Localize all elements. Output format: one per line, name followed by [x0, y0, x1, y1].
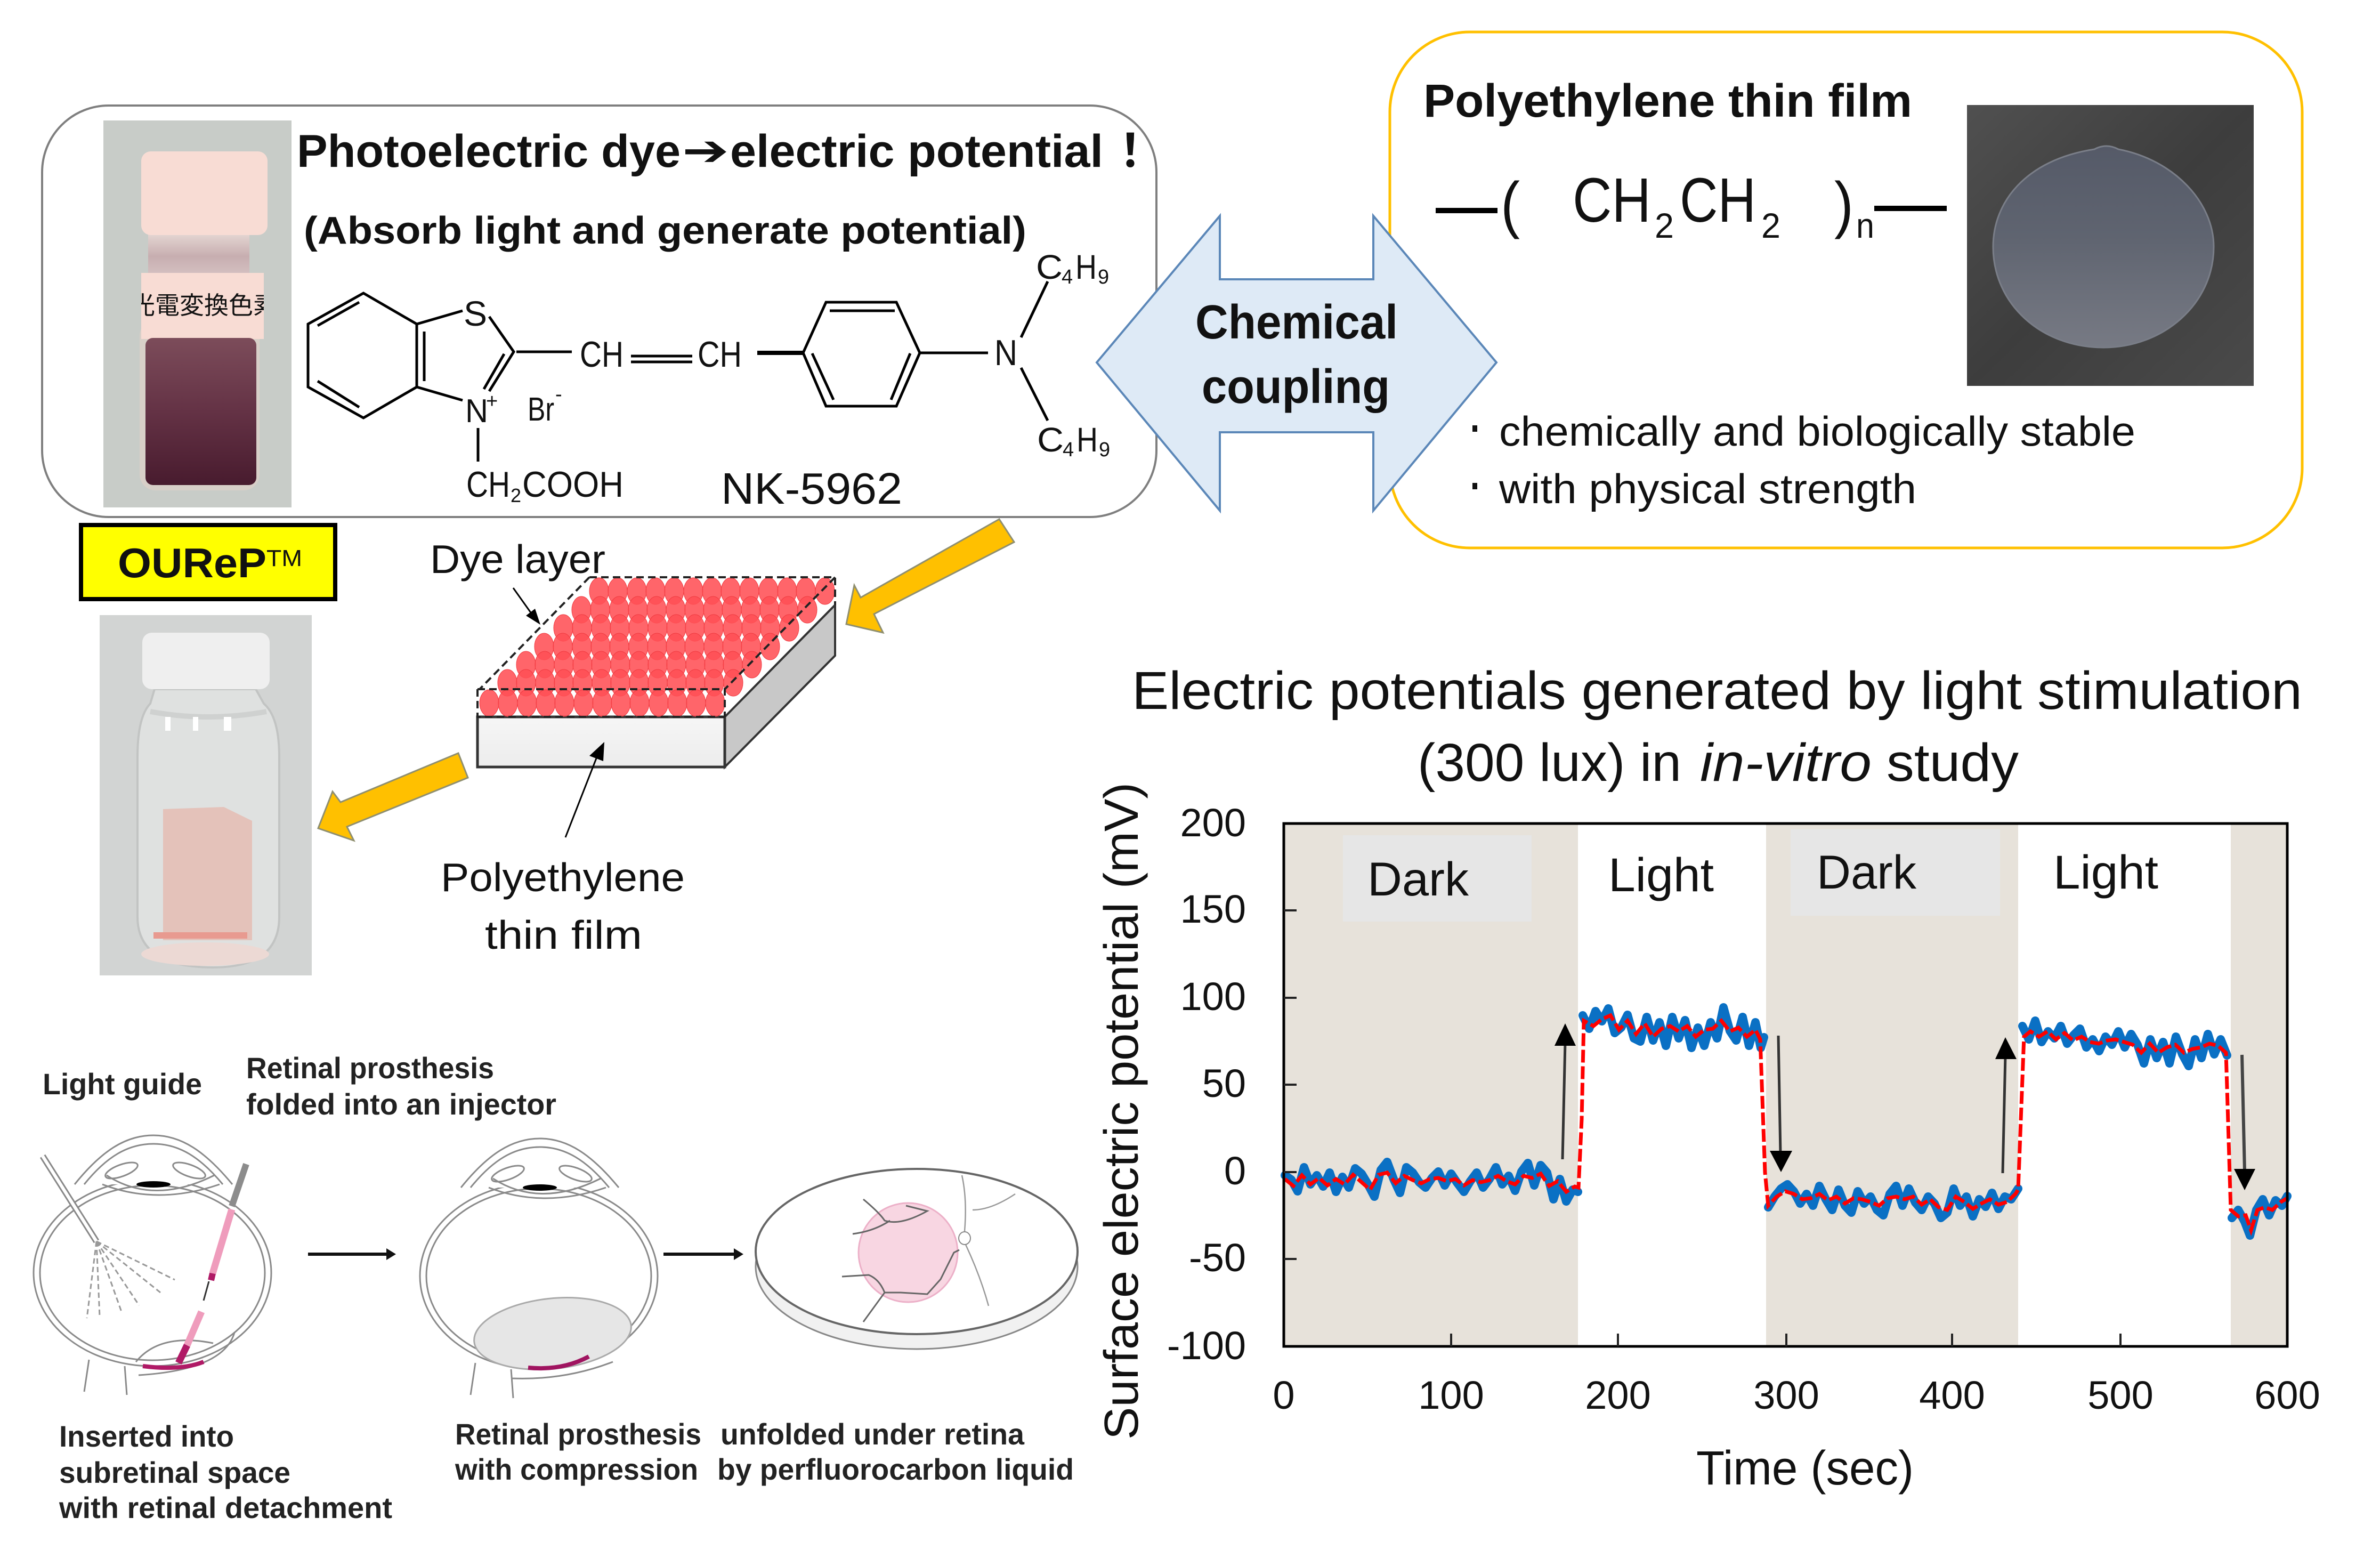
y axis values: 50	[1202, 1061, 1246, 1105]
formula: 2	[1655, 206, 1674, 245]
x axis values	[1273, 1373, 2320, 1417]
pointer: dye layer	[513, 588, 540, 625]
label: OUReP	[81, 525, 335, 599]
chart title	[1132, 661, 2302, 793]
chart title: in-vitro	[1700, 733, 1872, 793]
x axis values: 300	[1753, 1373, 1819, 1417]
arrow: dye to layer	[846, 519, 1014, 633]
heading: photoelectric dye	[297, 126, 1153, 177]
panel: polyethylene thin film	[1390, 32, 2302, 548]
x axis values: 200	[1585, 1373, 1651, 1417]
arrow: step 2 to 3	[663, 1248, 743, 1260]
diagram: eye 1, injection	[34, 1135, 271, 1395]
chemical structure: NK-5962: 2	[511, 485, 521, 506]
chemical structure: NK-5962: CH	[580, 334, 624, 375]
photo: OUReP vial	[100, 615, 312, 975]
compound name: NK-5962	[721, 464, 902, 513]
y axis values: 0	[1224, 1149, 1246, 1193]
surgical step captions: with compression	[455, 1452, 698, 1486]
label: polyethylene: thin film	[485, 913, 642, 957]
chemical structure: NK-5962	[308, 248, 1110, 506]
chemical structure: NK-5962: C	[1037, 421, 1064, 459]
surgical step captions: with retinal detachment	[59, 1491, 392, 1524]
label: OUReP: TM	[266, 545, 302, 571]
chemical structure: NK-5962: H	[1076, 421, 1098, 459]
period labels: Light	[1608, 848, 1714, 901]
diagram: dye layer on polyethylene	[430, 537, 835, 957]
surgical step captions: folded into an injector	[246, 1087, 556, 1121]
x axis values: 100	[1418, 1373, 1484, 1417]
x axis values: 600	[2254, 1373, 2320, 1417]
x axis title: Time (sec)	[1696, 1442, 1914, 1495]
formula: 2	[1761, 206, 1780, 245]
double arrow: chemical coupling: Chemical	[1195, 296, 1398, 349]
axes	[1284, 824, 2287, 1346]
chemical structure: NK-5962: +	[486, 390, 498, 413]
y axis values: 200	[1180, 801, 1246, 845]
chemical structure: NK-5962: N	[465, 393, 488, 430]
arrow: layer to OUReP	[318, 753, 468, 841]
chemical structure: NK-5962: 4	[1063, 439, 1074, 461]
surgical step captions: Inserted into	[59, 1419, 234, 1453]
surgical step captions: subretinal space	[59, 1456, 290, 1489]
surgical step captions: by perfluorocarbon liquid	[717, 1452, 1074, 1486]
formula: n	[1856, 206, 1874, 245]
label: polyethylene	[441, 855, 685, 957]
heading: photoelectric dye: ！	[1107, 126, 1153, 177]
chemical structure: NK-5962: C	[1036, 248, 1063, 286]
panel: photoelectric dye	[42, 106, 1156, 517]
bullet list: with physical strength	[1499, 465, 1916, 512]
pointer: polyethylene	[565, 742, 604, 837]
arrows: light on and off	[1555, 1023, 2255, 1190]
chemical structure: NK-5962: CH	[698, 334, 742, 375]
chart title: study	[1887, 733, 2019, 793]
chemical structure: NK-5962: Br	[528, 391, 554, 428]
plot bands: dark and light periods	[1284, 824, 2287, 1346]
label: OUReP: OUReP	[118, 539, 266, 586]
chemical structure: NK-5962: S	[464, 294, 487, 333]
y axis title: Surface electric potential (mV)	[1095, 782, 1148, 1440]
chart title: (300 lux) in	[1418, 733, 1681, 793]
chemical structure: NK-5962: N	[994, 333, 1017, 373]
period labels: Dark	[1817, 845, 1916, 899]
label: dye layer: Dye layer	[430, 537, 605, 582]
subheading: (Absorb light and generate potential)	[304, 209, 1026, 252]
x axis values: 400	[1919, 1373, 1985, 1417]
chemical structure: NK-5962: COOH	[522, 464, 624, 505]
surgical step captions: Retinal prosthesis	[455, 1417, 701, 1451]
chemical structure: NK-5962: 4	[1062, 266, 1073, 288]
formula: CH	[1680, 165, 1756, 236]
fitted trace	[1285, 1015, 2287, 1230]
period labels: Light	[2053, 845, 2158, 899]
bullet list	[1472, 408, 2135, 512]
period labels	[1367, 845, 2158, 906]
photo: polyethylene film	[1967, 105, 2254, 386]
y axis values: -50	[1189, 1236, 1246, 1280]
chemical structure: NK-5962: CH	[466, 464, 510, 505]
diagram: fundus with unfolded prosthesis	[756, 1169, 1078, 1349]
formula: (	[1501, 169, 1520, 240]
photo: dye vial: 光電変換色素	[131, 292, 278, 319]
chart title: Electric potentials generated by light stimulation	[1132, 661, 2302, 721]
heading: polyethylene: Polyethylene thin film	[1423, 75, 1912, 127]
heading: photoelectric dye: electric potential	[730, 126, 1103, 177]
formula: CH	[1573, 165, 1651, 236]
arrow: step 1 to 2	[308, 1248, 396, 1260]
period labels: Dark	[1367, 852, 1469, 906]
surgical step captions: Retinal prosthesis	[246, 1051, 494, 1085]
double arrow: chemical coupling: coupling	[1202, 360, 1390, 414]
data points	[1285, 1007, 2287, 1236]
x axis values: 0	[1273, 1373, 1295, 1417]
y axis values: 100	[1180, 974, 1246, 1019]
photo: dye vial	[103, 120, 292, 507]
formula: )	[1834, 169, 1853, 240]
chemical structure: NK-5962: 9	[1099, 439, 1110, 461]
label: polyethylene: Polyethylene	[441, 855, 685, 900]
heading: photoelectric dye: ➔	[682, 126, 729, 175]
y axis values: 150	[1180, 887, 1246, 931]
bullet list: chemically and biologically stable	[1499, 408, 2135, 455]
chemical structure: NK-5962: -	[555, 383, 562, 406]
y axis values	[1167, 801, 1246, 1368]
surgical step captions: Light guide	[43, 1067, 202, 1101]
x axis values: 500	[2087, 1373, 2154, 1417]
heading: photoelectric dye: Photoelectric dye	[297, 126, 681, 177]
chemical structure: NK-5962: 9	[1098, 266, 1109, 288]
double arrow: chemical coupling	[1097, 216, 1496, 511]
chemical structure: NK-5962: H	[1075, 248, 1097, 286]
surgical step captions: unfolded under retina	[721, 1417, 1025, 1451]
y axis values: -100	[1167, 1323, 1246, 1368]
diagram: eye 2, compression	[420, 1139, 658, 1398]
chart: surface electric potential	[1095, 782, 2320, 1495]
formula	[1436, 165, 1947, 245]
surgical step captions	[43, 1051, 1074, 1524]
